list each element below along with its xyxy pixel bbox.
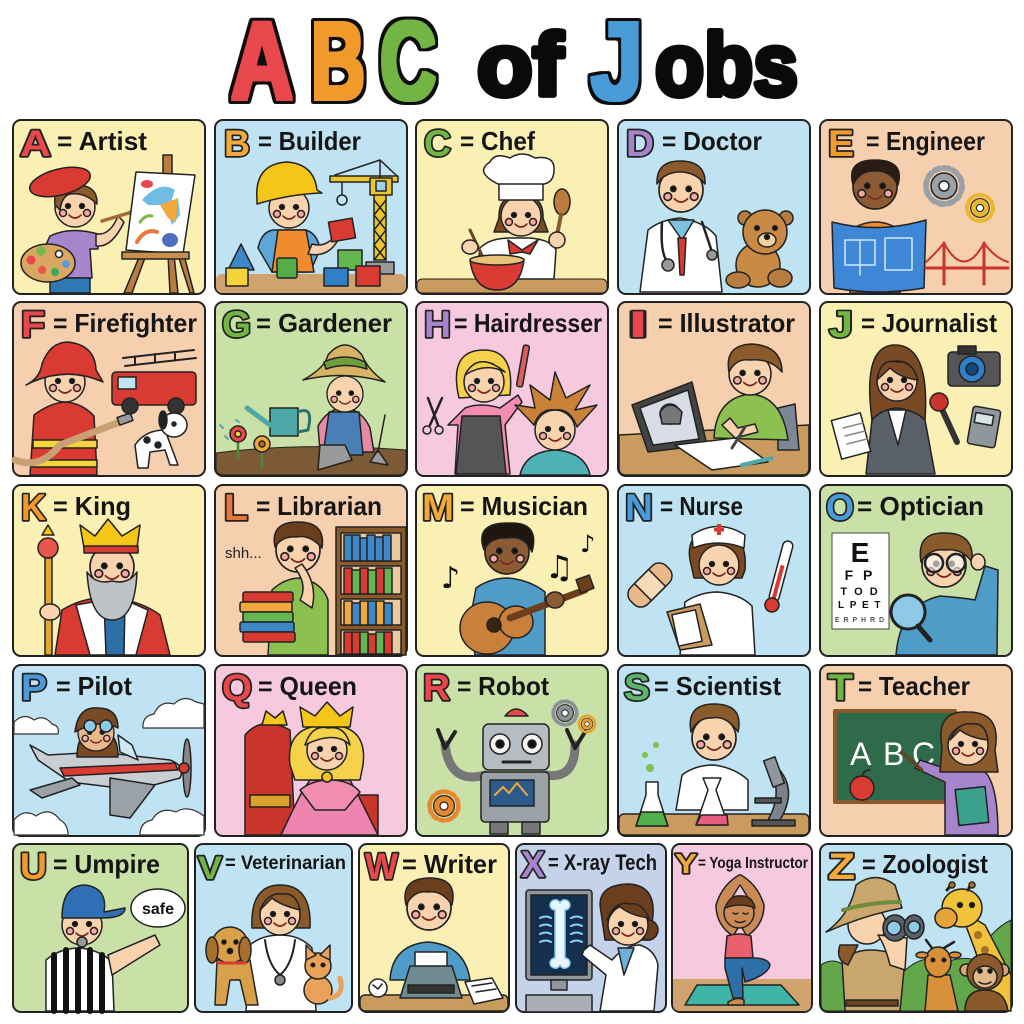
ground <box>216 274 406 293</box>
icon: crumpled paper <box>369 979 387 997</box>
icon: optician <box>891 533 998 655</box>
icon: notepad <box>831 413 871 459</box>
icon: typewriter <box>400 952 462 998</box>
icon: gears <box>430 701 595 820</box>
label: = Optician <box>857 491 984 521</box>
card <box>215 120 407 294</box>
label: = Writer <box>402 849 497 879</box>
label <box>675 848 808 879</box>
icon: teddy bear <box>726 210 793 288</box>
card <box>416 302 608 476</box>
eye chart: F P <box>845 567 875 583</box>
icon: microphone <box>930 393 957 442</box>
card <box>13 485 205 656</box>
panel: T Teacher <box>820 665 1012 836</box>
label: L <box>224 487 248 528</box>
icon: vet <box>246 885 316 1011</box>
panel: Y Yoga Instructor <box>672 844 812 1012</box>
label <box>423 667 549 708</box>
label <box>198 850 346 886</box>
card <box>215 302 407 476</box>
label: = Artist <box>57 126 147 156</box>
panel: H Hairdresser <box>416 302 608 476</box>
icon: antelope <box>916 940 961 1011</box>
panel: K King <box>13 485 205 656</box>
icon: stack of books <box>240 592 295 642</box>
card <box>618 302 810 476</box>
icon: microscope <box>752 757 795 826</box>
icon: music notes: ♪ <box>441 561 460 596</box>
icon: thermometer <box>763 539 796 614</box>
label: = Musician <box>460 491 588 521</box>
icon: artist child <box>21 162 153 293</box>
soil <box>216 447 406 475</box>
label <box>826 487 984 528</box>
panel: V Veterinarian <box>195 844 352 1012</box>
label: = Veterinarian <box>225 853 346 874</box>
icon: hairdresser <box>423 345 530 474</box>
icon: scientist <box>676 704 748 825</box>
label <box>828 123 985 164</box>
icon: sceptre <box>38 525 60 655</box>
label: = Builder <box>258 126 361 156</box>
counter <box>417 279 607 293</box>
icon: easel and canvas <box>122 155 195 293</box>
icon: apple <box>850 770 874 800</box>
card <box>13 120 205 294</box>
label: N <box>625 487 653 528</box>
panel: X X-ray Tech <box>516 844 666 1012</box>
icon: monkey <box>960 954 1009 1011</box>
label <box>20 123 147 164</box>
card <box>215 665 407 836</box>
label: F <box>21 304 45 345</box>
icon: dog <box>206 927 258 1005</box>
floor <box>673 979 811 1011</box>
title: A <box>231 0 293 123</box>
title: obs <box>655 15 798 114</box>
card <box>820 844 1012 1012</box>
icon: green flask <box>636 742 668 826</box>
label: G <box>222 304 251 345</box>
label <box>222 304 392 345</box>
icon: drawing paper and pencil <box>675 427 772 470</box>
label: = Gardener <box>256 308 392 338</box>
icon: nurse <box>667 524 755 655</box>
label <box>365 846 497 887</box>
label: K <box>21 487 46 528</box>
card <box>820 485 1012 656</box>
label <box>21 667 132 708</box>
icon: illustrator child <box>714 344 788 440</box>
label: = Nurse <box>660 491 743 521</box>
icon: technician <box>582 884 658 1011</box>
panel: D Doctor <box>618 120 810 294</box>
icon: camera <box>948 346 1000 386</box>
label <box>224 123 361 164</box>
panel: G Gardener <box>215 302 407 476</box>
panel: M Musician <box>416 485 608 656</box>
icon: clouds <box>14 698 204 835</box>
chalkboard <box>835 711 955 802</box>
card <box>618 665 810 836</box>
icon: gardener <box>303 345 388 470</box>
eye chart: L P E T <box>838 600 882 611</box>
icon: doctor <box>640 161 722 292</box>
panel: P Pilot <box>13 665 205 836</box>
text: shh: shh... <box>225 545 262 562</box>
label: = Scientist <box>654 671 781 701</box>
card <box>215 485 407 656</box>
icon: airplane with pilot <box>30 708 191 818</box>
label <box>21 304 197 345</box>
label: O <box>826 487 854 528</box>
label: R <box>423 667 450 708</box>
icon: recorder <box>967 406 1001 448</box>
card <box>820 302 1012 476</box>
label: = Queen <box>258 671 357 701</box>
label: = Engineer <box>866 126 985 156</box>
card <box>359 844 509 1012</box>
label: J <box>829 304 853 345</box>
label: = Teacher <box>858 671 970 701</box>
icon: yoga figure <box>716 875 770 1005</box>
card <box>618 485 810 656</box>
label: = Illustrator <box>658 308 795 338</box>
label: H <box>424 304 451 345</box>
label <box>424 123 535 164</box>
icon: writer <box>390 878 470 980</box>
icon: bandage <box>624 559 676 611</box>
desk <box>360 995 508 1011</box>
label: = Chef <box>460 126 535 156</box>
panel: S Scientist <box>618 665 810 836</box>
card <box>516 844 666 1012</box>
icon: tablet with portrait <box>632 382 707 452</box>
label: = Umpire <box>53 849 160 879</box>
icon: fire truck <box>112 350 196 414</box>
icon: toy blocks <box>226 244 380 286</box>
icon: queen <box>281 702 378 835</box>
icon: music notes: ♫ <box>545 548 574 586</box>
icon: client with messy hair <box>515 372 597 475</box>
panel: C Chef <box>416 120 608 294</box>
label <box>828 667 970 708</box>
icon: umpire <box>46 885 160 1011</box>
label <box>20 846 160 887</box>
icon: journalist <box>866 345 935 474</box>
label: = Yoga Instructor <box>698 855 808 872</box>
panel: F Firefighter <box>13 302 205 476</box>
card <box>820 120 1012 294</box>
card <box>195 844 352 1012</box>
title: of <box>477 15 564 114</box>
panel: W Writer <box>359 844 509 1012</box>
icon: bookshelf <box>336 527 406 655</box>
card <box>416 665 608 836</box>
label: T <box>828 667 853 708</box>
icon: musician child <box>460 523 594 655</box>
label: V <box>198 850 223 886</box>
eye chart: E <box>851 537 869 568</box>
icon: giraffe <box>935 882 1011 1011</box>
icon: robot <box>438 709 585 834</box>
speech bubble <box>131 889 185 927</box>
icon: cat <box>304 945 341 1004</box>
label: = Pilot <box>56 671 132 701</box>
label: M <box>422 487 454 528</box>
desk <box>619 425 809 475</box>
card <box>13 844 188 1012</box>
label <box>21 487 131 528</box>
label: Q <box>222 667 252 708</box>
label: = Journalist <box>861 308 997 338</box>
icon: watering can <box>220 408 310 439</box>
label: W <box>365 846 398 887</box>
label: B <box>224 123 250 164</box>
card <box>13 665 205 836</box>
label <box>829 304 997 345</box>
label <box>222 667 357 708</box>
eye chart <box>832 533 889 629</box>
label: Y <box>675 848 697 879</box>
label <box>224 487 382 528</box>
icon: gears <box>926 168 993 221</box>
card <box>820 665 1012 836</box>
eye chart: T O D <box>840 586 880 598</box>
label: U <box>20 846 47 887</box>
label: C <box>424 123 451 164</box>
icon: bridge <box>926 243 1008 284</box>
label <box>626 123 762 164</box>
label: = Zoologist <box>862 849 988 879</box>
eye chart: E R P H R D <box>835 617 885 624</box>
icon: throne <box>245 711 378 835</box>
label <box>624 667 781 708</box>
label: = King <box>53 491 131 521</box>
title: C <box>380 0 436 123</box>
icon: zoologist <box>826 878 924 1011</box>
label <box>625 487 743 528</box>
label: P <box>21 667 47 708</box>
icon: teacher <box>902 712 998 835</box>
label: = Librarian <box>256 491 382 521</box>
panel: Q Queen <box>215 665 407 836</box>
icon: chef child <box>462 154 570 290</box>
card <box>416 485 608 656</box>
panel: B Builder <box>215 120 407 294</box>
label: = X-ray Tech <box>548 850 657 875</box>
chalkboard: ABC <box>850 736 935 772</box>
label <box>422 487 588 528</box>
panel: J Journalist <box>820 302 1012 476</box>
label: X <box>521 844 545 885</box>
icon: engineer <box>832 160 926 293</box>
label <box>828 846 988 887</box>
icon: music notes <box>441 530 595 596</box>
panel: O Optician <box>820 485 1012 656</box>
icon: librarian <box>268 522 328 655</box>
panel: N Nurse <box>618 485 810 656</box>
label: = Hairdresser <box>454 308 602 338</box>
icon: chair <box>778 404 799 450</box>
title: J <box>591 0 643 123</box>
icon: papers <box>465 978 503 1004</box>
label: = Firefighter <box>53 308 197 338</box>
icon: king <box>55 519 170 655</box>
card <box>672 844 812 1012</box>
bushes <box>821 920 1011 1011</box>
panel: Z Zoologist <box>820 844 1012 1012</box>
label <box>521 844 657 885</box>
label: S <box>624 667 650 708</box>
label: D <box>626 123 654 164</box>
icon: tower crane <box>330 160 398 274</box>
icon: dalmatian <box>135 411 187 468</box>
counter <box>619 814 809 835</box>
title <box>231 0 798 123</box>
icon: x-ray monitor <box>526 890 592 1012</box>
card <box>13 302 205 476</box>
panel: L Librarian <box>215 485 407 656</box>
label: E <box>828 123 854 164</box>
label <box>628 304 795 345</box>
title: B <box>311 0 365 123</box>
speech bubble: safe <box>142 901 174 918</box>
icon: firefighter <box>15 342 133 475</box>
label: I <box>628 304 648 345</box>
label: = Doctor <box>662 126 762 156</box>
card <box>416 120 608 294</box>
panel: R Robot <box>416 665 608 836</box>
panel: I Illustrator <box>618 302 810 476</box>
icon: builder child <box>257 162 356 278</box>
card <box>618 120 810 294</box>
panel: A Artist <box>13 120 205 294</box>
label: A <box>20 123 51 164</box>
icon: flowers <box>230 426 270 468</box>
icon: music notes: ♪ <box>580 530 595 558</box>
label <box>424 304 602 345</box>
label: Z <box>828 846 855 887</box>
panel: U Umpire <box>13 844 188 1012</box>
panel: E Engineer <box>820 120 1012 294</box>
label: = Robot <box>457 671 549 701</box>
yoga mat <box>685 985 799 1005</box>
